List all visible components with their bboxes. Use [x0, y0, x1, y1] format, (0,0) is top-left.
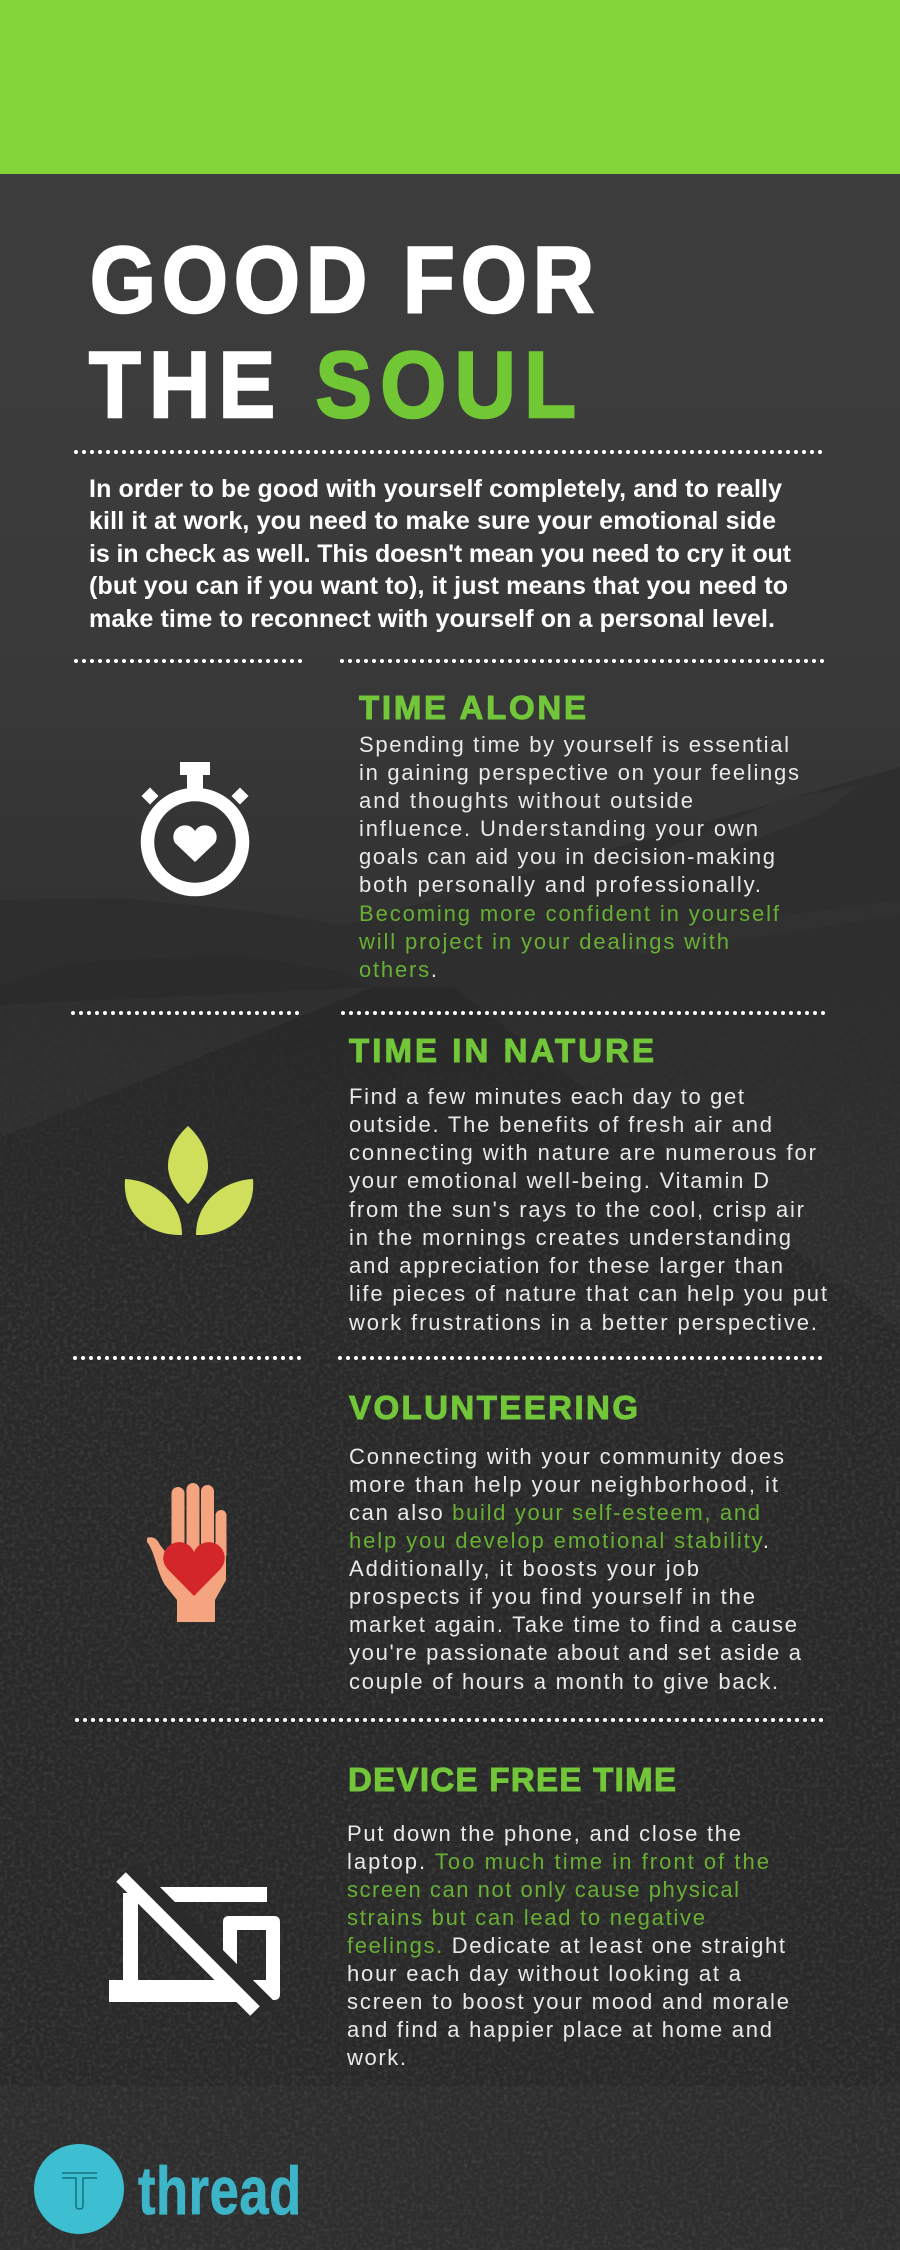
text block: time alone: goals can aid you in decision-making	[359, 844, 775, 869]
panel: device free time	[346, 1761, 789, 2070]
text block: time in nature: connecting with nature are numerous for	[349, 1140, 816, 1165]
text block: time alone: will project in your dealings with	[358, 929, 729, 954]
logo mark	[34, 2144, 124, 2234]
text block: time in nature	[348, 1084, 827, 1335]
text block: time in nature: in the mornings creates understanding	[349, 1225, 791, 1250]
text block: volunteering: more than help your neighborhood, it	[349, 1472, 778, 1497]
text block: time in nature: life pieces of nature that can help you put	[349, 1281, 827, 1306]
text block: device free time: work.	[346, 2045, 406, 2070]
text block: volunteering: help you develop emotional stability.	[349, 1528, 769, 1553]
icon: device free	[109, 1868, 280, 2011]
text block: device free time: strains but can lead to negative	[347, 1905, 705, 1930]
panel: time alone	[358, 689, 799, 982]
logo: thread	[34, 2144, 301, 2234]
title	[89, 227, 594, 437]
text block: time alone: Spending time by yourself is essential	[359, 732, 789, 757]
text block: volunteering: prospects if you find yourself in the	[349, 1584, 755, 1609]
text block: time alone: and thoughts without outside	[359, 788, 693, 813]
text block: device free time	[346, 1821, 789, 2070]
icon: three leaves	[125, 1126, 253, 1235]
heading: volunteering: VOLUNTEERING	[349, 1389, 638, 1426]
panel: volunteering	[349, 1389, 802, 1694]
text block: time alone	[358, 732, 799, 982]
top green banner	[0, 0, 900, 174]
icon: hand holding heart	[147, 1483, 226, 1622]
text block: volunteering	[349, 1444, 802, 1694]
text block: time in nature: outside. The benefits of fresh air and	[349, 1112, 772, 1137]
text block: device free time: hour each day without looking at a	[347, 1961, 742, 1986]
text block: volunteering: couple of hours a month to give back.	[349, 1669, 778, 1694]
text block: volunteering: Connecting with your community does	[349, 1444, 784, 1469]
text block: time alone: influence. Understanding your own	[359, 816, 758, 841]
intro paragraph	[89, 475, 792, 633]
text block: time in nature: Find a few minutes each day to get	[349, 1084, 744, 1109]
text block: device free time: screen can not only cause physical	[347, 1877, 739, 1902]
heading: time alone: TIME ALONE	[359, 689, 586, 726]
intro paragraph: make time to reconnect with yourself on a personal level.	[89, 605, 775, 633]
text block: time in nature: your emotional well-being. Vitamin D	[349, 1168, 769, 1193]
intro paragraph: (but you can if you want to), it just means that you need to	[89, 572, 788, 600]
text block: time alone: Becoming more confident in yourself	[359, 901, 780, 926]
intro paragraph: In order to be good with yourself completely, and to really	[89, 475, 782, 503]
icon: stopwatch with heart	[142, 762, 248, 890]
text block: time in nature: and appreciation for these larger than	[349, 1253, 783, 1278]
title: THE SOUL	[89, 332, 576, 437]
text block: device free time: screen to boost your mood and morale	[347, 1989, 789, 2014]
text block: volunteering: you're passionate about and set aside a	[349, 1640, 802, 1665]
text block: device free time: feelings. Dedicate at least one straight	[347, 1933, 785, 1958]
text block: volunteering: market again. Take time to find a cause	[349, 1612, 797, 1637]
logo wordmark: thread	[138, 2152, 301, 2229]
text block: device free time: Put down the phone, and close the	[347, 1821, 741, 1846]
intro paragraph: kill it at work, you need to make sure your emotional side	[89, 507, 776, 535]
text block: time in nature: from the sun's rays to the cool, crisp air	[349, 1197, 804, 1222]
heading: time in nature: TIME IN NATURE	[349, 1032, 654, 1069]
text block: device free time: and find a happier place at home and	[347, 2017, 772, 2042]
text block: volunteering: can also build your self-esteem, and	[349, 1500, 760, 1525]
text block: time alone: in gaining perspective on your feelings	[359, 760, 799, 785]
text block: volunteering: Additionally, it boosts your job	[349, 1556, 699, 1581]
heading: device free time: DEVICE FREE TIME	[348, 1761, 676, 1798]
text block: time in nature: work frustrations in a better perspective.	[348, 1310, 817, 1335]
text block: time alone: others.	[359, 957, 437, 982]
panel: time in nature	[348, 1032, 827, 1335]
intro paragraph: is in check as well. This doesn't mean you need to cry it out	[89, 540, 792, 568]
text block: time alone: both personally and professionally.	[359, 872, 761, 897]
title: GOOD FOR	[90, 227, 594, 332]
text block: device free time: laptop. Too much time in front of the	[347, 1849, 769, 1874]
